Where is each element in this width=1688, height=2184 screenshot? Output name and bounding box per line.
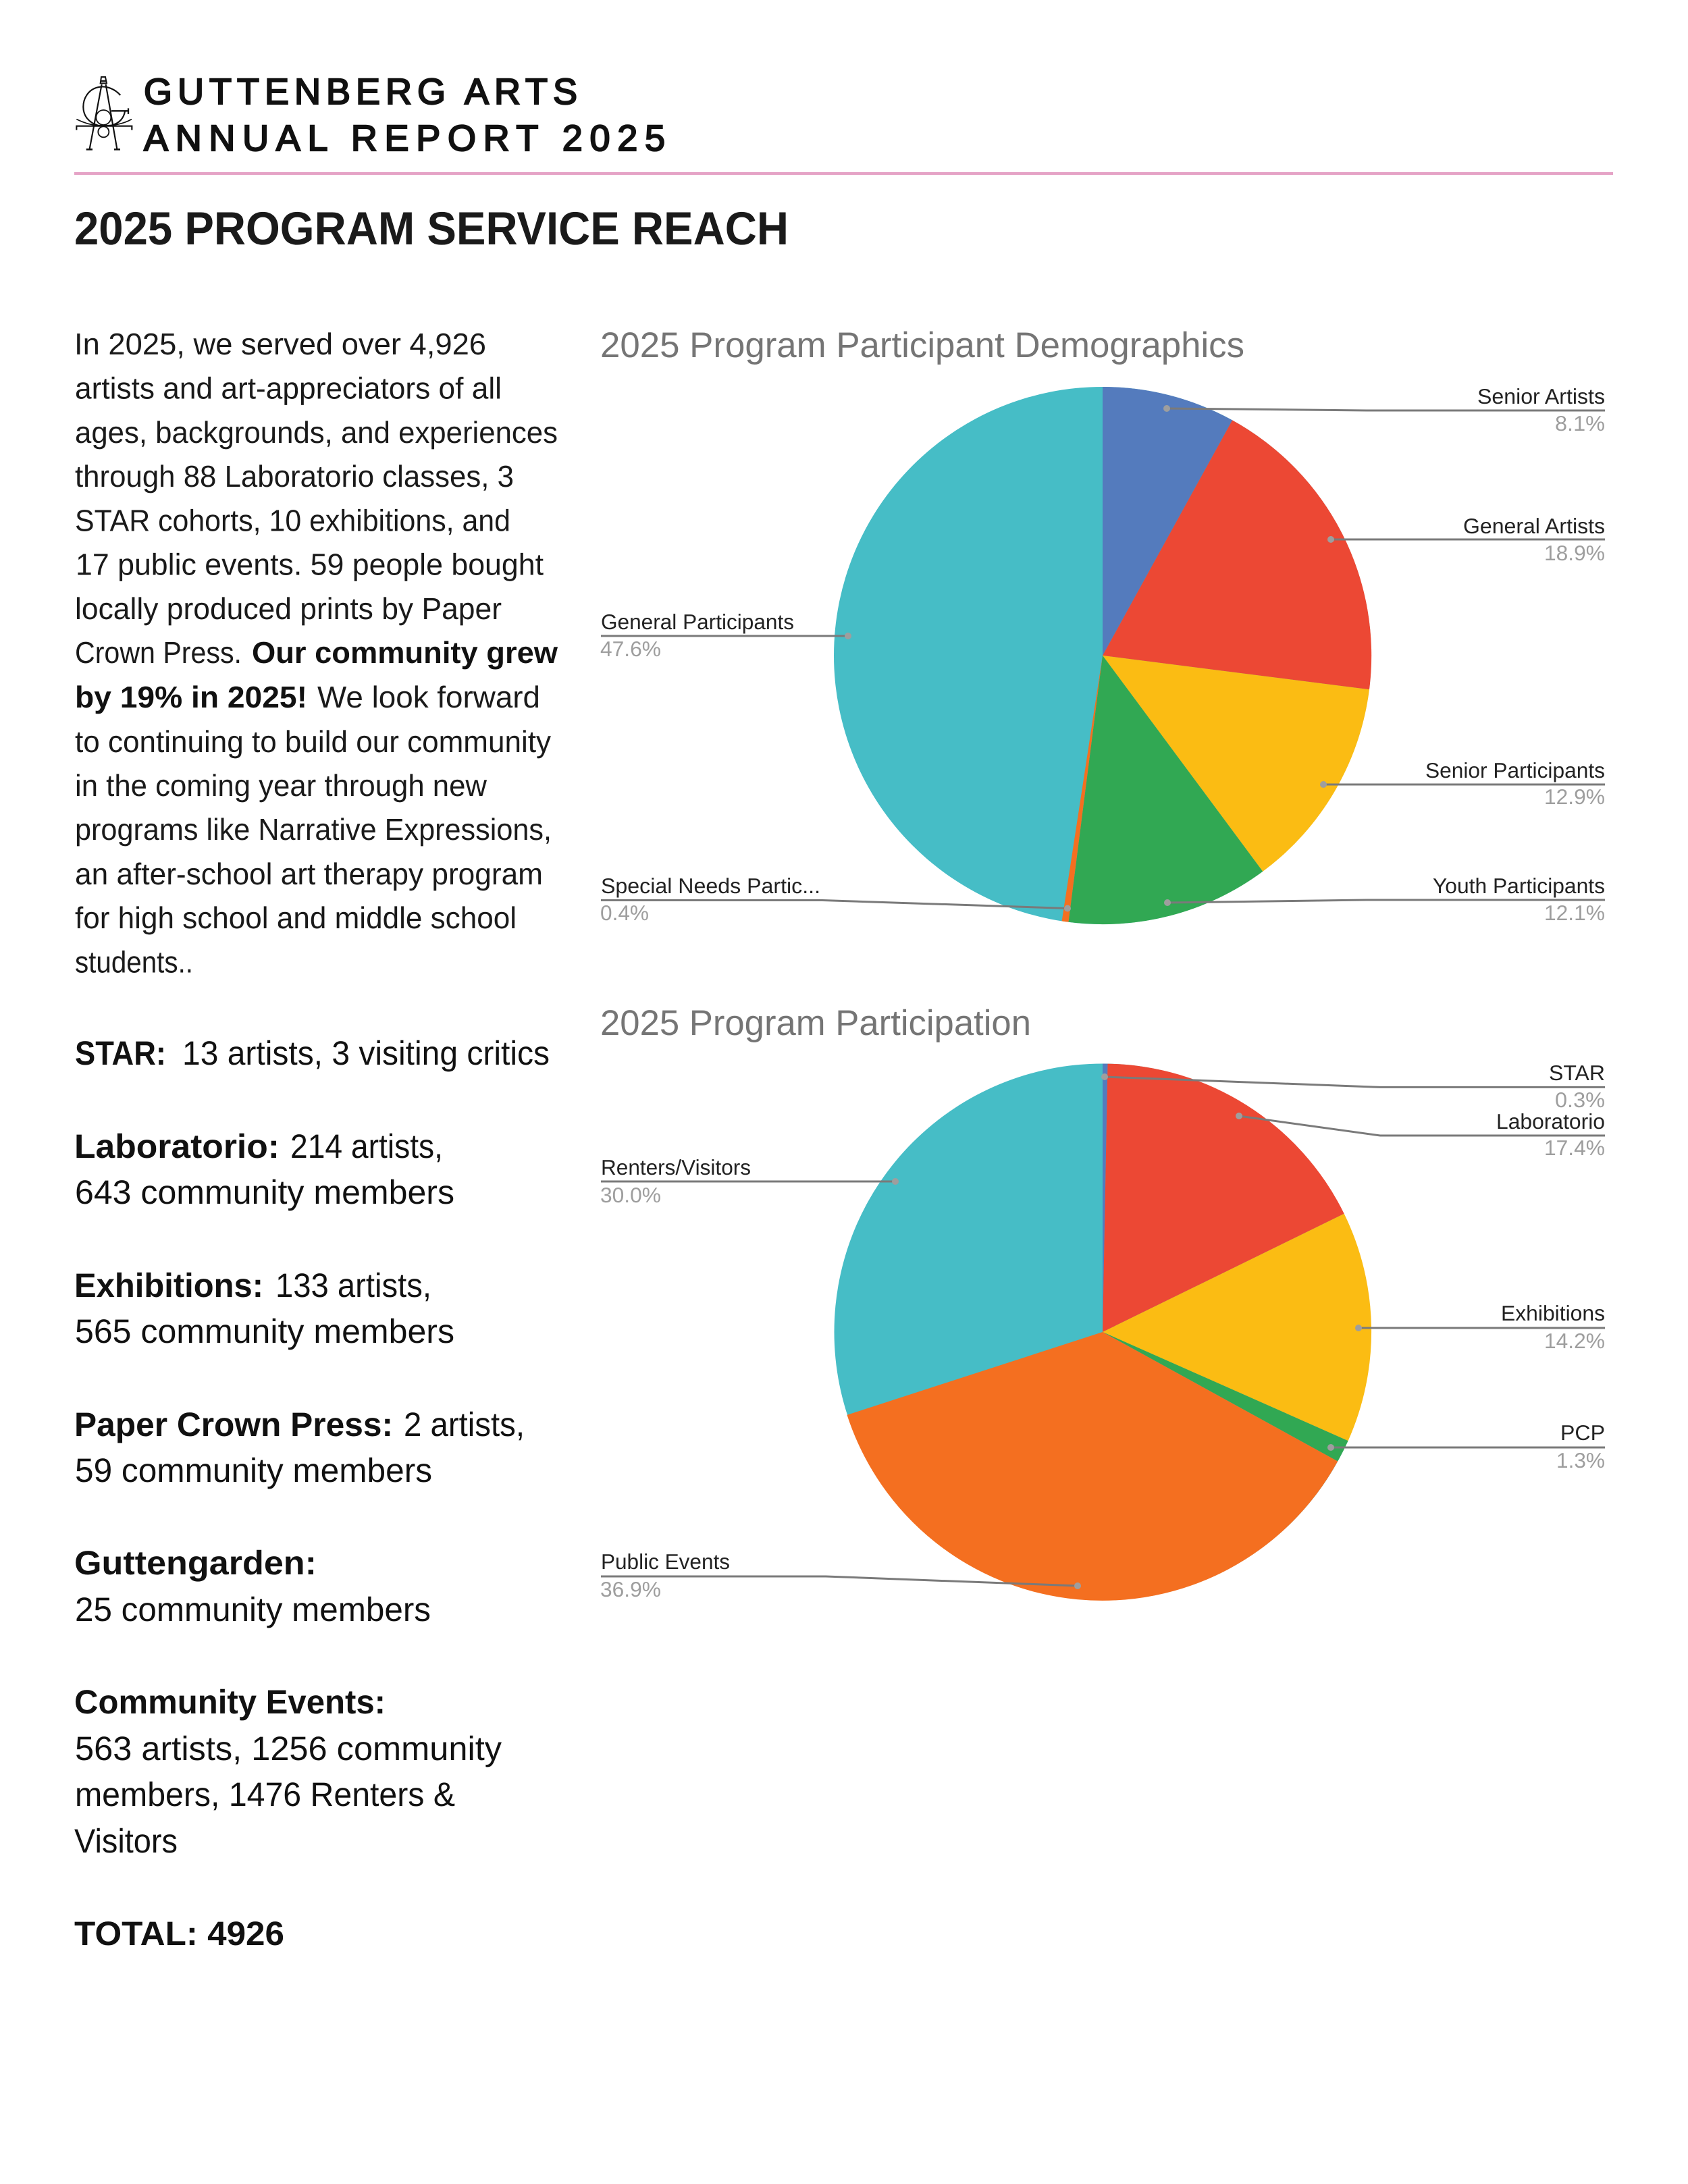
label: Exhibitions: 14.2% (1544, 1329, 1605, 1353)
text block: intro paragraph: ages, backgrounds, and experiences (75, 415, 558, 450)
text block: intro paragraph: an after-school art therapy program (75, 857, 543, 891)
text block: intro paragraph: programs like Narrative Expressions, (75, 812, 552, 847)
label: PCP (1327, 1420, 1605, 1472)
label: Laboratorio: 17.4% (1544, 1136, 1605, 1160)
pie (835, 1064, 1371, 1601)
label: Senior Participants: 12.9% (1544, 784, 1605, 809)
label: General Artists: General Artists (1463, 514, 1605, 538)
label: General Artists (1327, 514, 1605, 565)
text block: program totals: 13 artists, 3 visiting critics (182, 1034, 550, 1072)
label: Laboratorio: Laboratorio (1496, 1109, 1605, 1134)
text block: program totals: Exhibitions: (74, 1267, 263, 1304)
text block: intro paragraph: Crown Press. (75, 635, 242, 670)
text block: program totals: members, 1476 Renters & (75, 1776, 455, 1813)
text block: intro paragraph: artists and art-appreciators of all (75, 371, 502, 405)
label: PCP: PCP (1560, 1420, 1605, 1445)
label: Senior Artists: Senior Artists (1477, 384, 1605, 408)
text block: program totals: Paper Crown Press: (74, 1406, 393, 1443)
text block: program totals: 133 artists, (275, 1267, 431, 1304)
label: Senior Artists: 8.1% (1555, 411, 1605, 435)
text block: program totals: 643 community members (75, 1173, 454, 1211)
label: Senior Participants (1320, 758, 1605, 809)
label: Youth Participants: 12.1% (1544, 901, 1605, 925)
label: Public Events (600, 1549, 1081, 1601)
text block: intro paragraph: in the coming year through new (75, 768, 487, 803)
chart title: 2025 Program Participant Demographics (600, 325, 1244, 365)
header: report name: ANNUAL REPORT 2025 (144, 118, 665, 159)
text block: program totals: 563 artists, 1256 community (75, 1730, 502, 1767)
text block: intro paragraph: STAR cohorts, 10 exhibitions, and (75, 504, 510, 537)
label: General Participants: 47.6% (600, 637, 661, 661)
text block: intro paragraph (74, 327, 558, 979)
label: Youth Participants (1164, 874, 1605, 925)
label: Senior Participants: Senior Participants (1425, 758, 1605, 782)
label: General Participants (600, 610, 851, 661)
label: Special Needs Participants: Special Needs Partic... (601, 874, 820, 898)
label: Special Needs Participants (600, 874, 1071, 925)
label: STAR (1101, 1061, 1605, 1112)
label: PCP: 1.3% (1556, 1448, 1605, 1472)
text block: program totals: 214 artists, (290, 1127, 443, 1165)
label: STAR: STAR (1549, 1061, 1605, 1085)
label: Public Events: Public Events (601, 1549, 730, 1574)
label: Special Needs Participants: 0.4% (600, 901, 649, 925)
text block: intro paragraph: by 19% in 2025! (75, 680, 307, 714)
label: STAR: 0.3% (1555, 1088, 1605, 1112)
text block: program totals: Laboratorio: (74, 1127, 280, 1165)
label: Youth Participants: Youth Participants (1433, 874, 1605, 898)
text block: program totals: 565 community members (75, 1312, 454, 1350)
pie (834, 387, 1371, 924)
label: Exhibitions (1355, 1301, 1605, 1353)
text block: program totals: STAR: (75, 1034, 166, 1072)
header: report name (144, 72, 665, 159)
text block: program totals: Guttengarden: (74, 1544, 317, 1582)
text block: intro paragraph: locally produced prints by Paper (75, 591, 502, 626)
text block: intro paragraph: 17 public events. 59 people bought (76, 547, 544, 582)
text block: intro paragraph: through 88 Laboratorio classes, 3 (75, 459, 514, 494)
title: 2025 PROGRAM SERVICE REACH (74, 203, 789, 255)
label: Public Events: 36.9% (600, 1577, 661, 1601)
text block: intro paragraph: to continuing to build our community (75, 724, 551, 759)
text block: intro paragraph: We look forward (317, 680, 540, 714)
label: Exhibitions: Exhibitions (1501, 1301, 1605, 1325)
label: General Participants: General Participants (601, 610, 794, 634)
text block: program totals (74, 1034, 550, 1952)
header: report name: GUTTENBERG ARTS (144, 72, 577, 112)
label: Laboratorio (1236, 1109, 1605, 1160)
text block: program totals: 2 artists, (404, 1406, 525, 1443)
icon: Guttenberg Arts logo (76, 77, 132, 149)
chart: 2025 Program Participation (600, 1003, 1605, 1601)
text block: program totals: 59 community members (75, 1451, 432, 1489)
text block: program totals: Visitors (74, 1822, 178, 1860)
label: Renters/Visitors: 30.0% (600, 1183, 661, 1207)
label: Senior Artists (1163, 384, 1605, 435)
text block: intro paragraph: Our community grew (252, 635, 558, 670)
text block: intro paragraph: students.. (75, 945, 193, 979)
chart title: 2025 Program Participation (600, 1003, 1031, 1043)
text block: intro paragraph: for high school and middle school (75, 901, 517, 935)
text block: program totals: 25 community members (75, 1591, 431, 1628)
text block: program totals: Community Events: (74, 1683, 386, 1721)
text block: intro paragraph: In 2025, we served over 4,926 (74, 327, 486, 361)
text block: program totals: TOTAL: 4926 (74, 1915, 284, 1952)
label: General Artists: 18.9% (1544, 541, 1605, 565)
chart: 2025 Program Participant Demographics (600, 325, 1605, 925)
label: Renters/Visitors: Renters/Visitors (601, 1155, 751, 1179)
label: Renters/Visitors (600, 1155, 899, 1207)
